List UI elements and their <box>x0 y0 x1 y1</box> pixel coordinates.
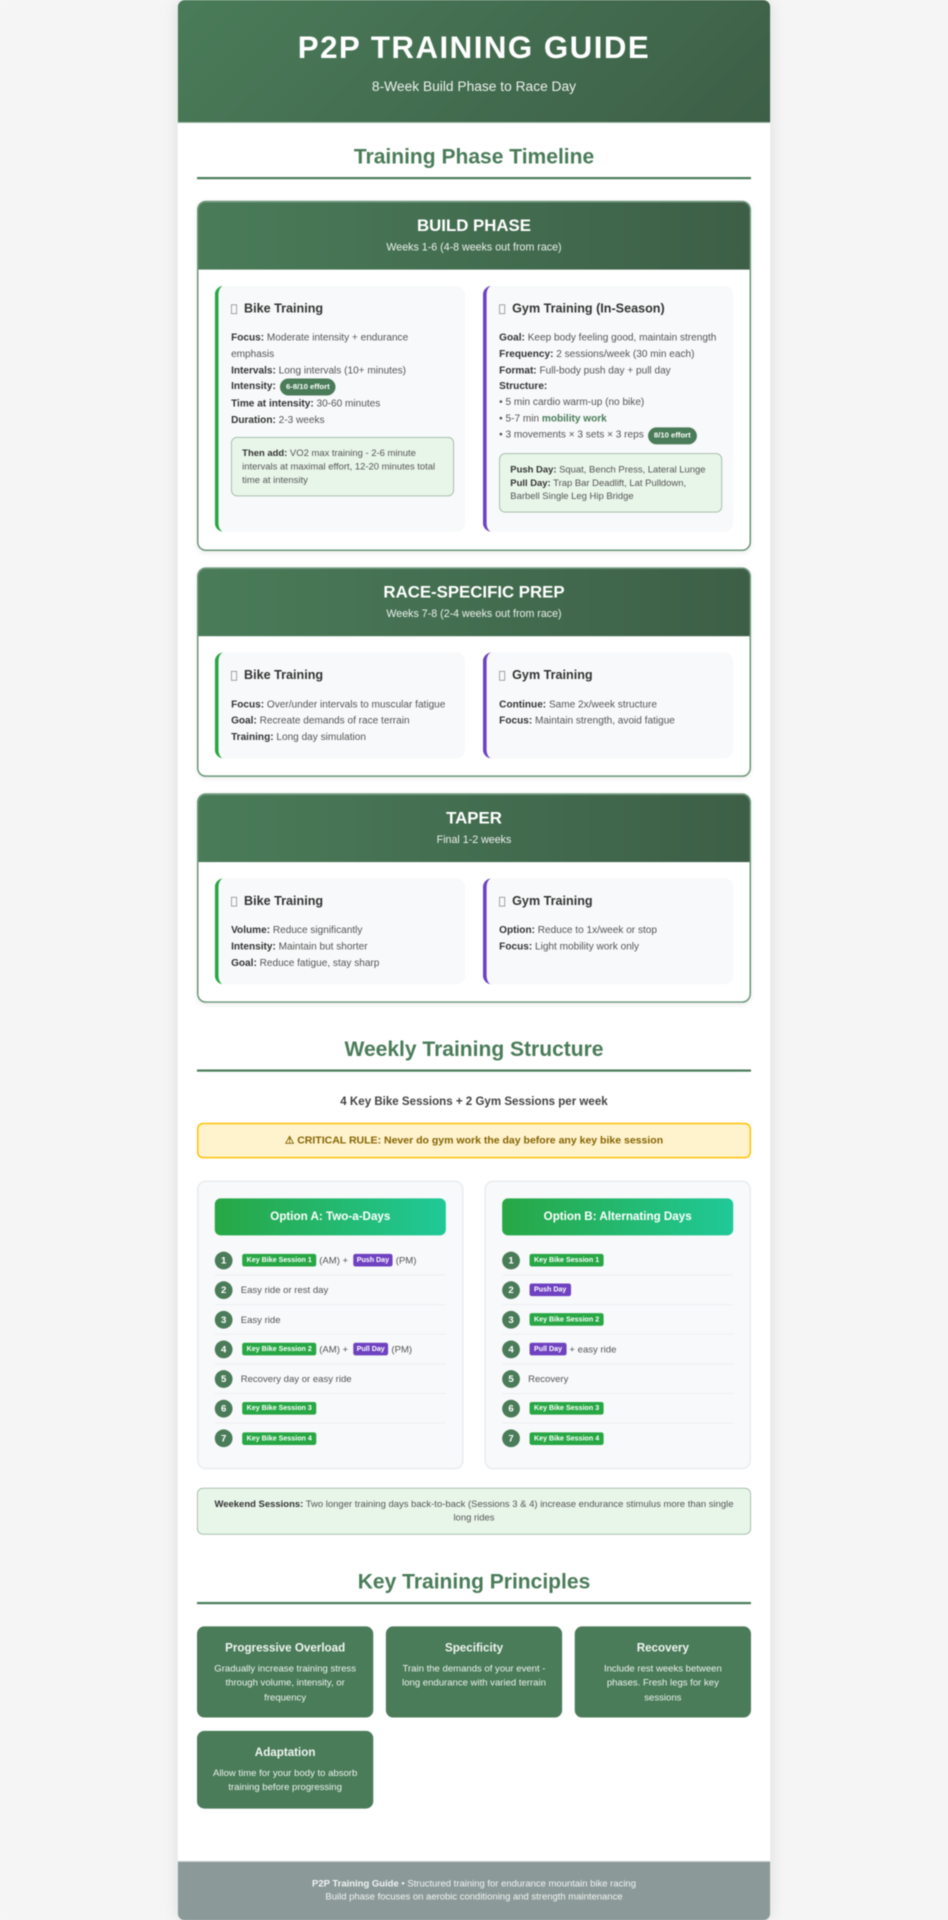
card: taper gym training <box>483 878 733 984</box>
taper header: Final 1-2 weeks <box>437 834 511 846</box>
panel: option A: Easy ride or rest day <box>241 1284 328 1295</box>
race-specific header: Weeks 7-8 (2-4 weeks out from race) <box>386 608 562 620</box>
section heading: principles: Key Training Principles <box>358 1570 590 1594</box>
option A heading <box>215 1198 446 1235</box>
card: build gym training: Frequency: 2 sessions/week (30 min each) <box>499 348 694 359</box>
section heading: timeline <box>197 144 751 179</box>
taper header <box>197 793 751 862</box>
panel: option A: 1 <box>221 1254 226 1265</box>
card: race gym training: Continue: Same 2x/week structure <box>499 698 657 710</box>
taper header: TAPER <box>446 808 502 827</box>
panel: option B: + easy ride <box>569 1343 616 1355</box>
build phase header: BUILD PHASE <box>417 216 531 235</box>
panel: option B <box>484 1181 751 1469</box>
callout: push and pull days: Push Day: Squat, Bench Press, Lateral Lunge <box>510 463 706 474</box>
card: build gym training: Format: Full-body push day + pull day <box>499 364 671 375</box>
panel: option A: Pull Day <box>357 1345 385 1353</box>
section heading: weekly structure: Weekly Training Structure <box>344 1038 604 1061</box>
panel: option A: Key Bike Session 2 <box>247 1345 312 1353</box>
principle: adaptation: Allow time for your body to absorb training before progressing <box>213 1767 357 1792</box>
footer: P2P Training Guide • Structured training for endurance mountain bike racing <box>312 1877 636 1889</box>
principle: specificity: Specificity <box>445 1642 503 1654</box>
card: taper gym training: Gym Training <box>512 894 593 908</box>
panel: option B: Pull Day <box>534 1345 562 1353</box>
card: build gym training: Gym Training (In-Season) <box>512 301 665 316</box>
panel: option B: Push Day <box>534 1286 566 1294</box>
panel: option A: (AM) + (PM) <box>319 1343 412 1355</box>
principle: progressive overload: Progressive Overload <box>225 1642 345 1654</box>
panel: option B: Key Bike Session 3 <box>534 1404 599 1412</box>
panel: option A: 6 <box>221 1402 226 1413</box>
card: build bike training <box>215 286 465 532</box>
panel: option A: Key Bike Session 3 <box>247 1404 312 1412</box>
panel: option B: 3 <box>508 1313 514 1325</box>
card: build gym training: Goal: Keep body feeling good, maintain strength <box>499 332 716 343</box>
panel: option A: Key Bike Session 4 <box>247 1434 312 1442</box>
card: taper bike training: Bike Training <box>244 894 323 908</box>
card: taper bike training: Intensity: Maintain but shorter <box>231 940 368 952</box>
panel: option B: 4 <box>508 1343 514 1354</box>
footer: Build phase focuses on aerobic conditioning and strength maintenance <box>325 1891 623 1902</box>
principle: recovery <box>575 1626 751 1718</box>
principle: adaptation <box>197 1731 373 1809</box>
build phase header <box>197 201 751 270</box>
principle: specificity: Train the demands of your event - long endurance with varied terrain <box>402 1662 546 1688</box>
card: race bike training: Bike Training <box>244 668 323 682</box>
principle: recovery: Include rest weeks between phases. Fresh legs for key sessions <box>604 1662 722 1702</box>
card: build bike training: Duration: 2-3 weeks <box>231 414 325 425</box>
panel: option B: 1 <box>508 1254 514 1265</box>
weekly summary text: 4 Key Bike Sessions + 2 Gym Sessions per week <box>340 1095 608 1108</box>
panel: option A: 5 <box>221 1373 226 1384</box>
principle: progressive overload: Gradually increase training stress through volume, intensity, or frequency <box>214 1662 356 1702</box>
panel: option B: 2 <box>508 1284 514 1295</box>
card: build bike training: Intervals: Long intervals (10+ minutes) <box>231 364 406 375</box>
race-specific header <box>197 567 751 636</box>
card: build gym training <box>483 286 733 532</box>
weekly options wrapper <box>197 1180 751 1470</box>
panel: option A: Push Day <box>357 1256 389 1264</box>
card: build gym training: Structure: <box>499 380 547 391</box>
card: taper gym training: Option: Reduce to 1x/week or stop <box>499 924 657 935</box>
panel: option B: Recovery <box>528 1373 568 1384</box>
panel: option A: 4 <box>221 1343 226 1354</box>
callout: then add <box>231 437 454 497</box>
race-specific header: RACE-SPECIFIC PREP <box>383 582 565 601</box>
card: build bike training: Bike Training <box>244 301 323 316</box>
card: race bike training: Goal: Recreate demands of race terrain <box>231 715 410 726</box>
critical rule callout <box>197 1123 751 1158</box>
panel: option A: 7 <box>221 1432 226 1443</box>
card: race bike training: Focus: Over/under intervals to muscular fatigue <box>231 698 445 710</box>
panel: option A: 2 <box>221 1284 226 1295</box>
card: taper bike training <box>215 878 465 984</box>
card: build bike training: Intensity: <box>231 380 276 391</box>
callout: push and pull days: Pull Day: Trap Bar Deadlift, Lat Pulldown, Barbell Single Leg Hip Bridge <box>510 477 686 501</box>
card: taper bike training: Volume: Reduce significantly <box>231 924 362 935</box>
build phase header: Weeks 1-6 (4-8 weeks out from race) <box>386 241 562 253</box>
option A heading: Option A: Two-a-Days <box>270 1210 390 1223</box>
callout: push and pull days <box>499 453 722 513</box>
card: race bike training <box>215 652 465 758</box>
panel: option B: Key Bike Session 4 <box>534 1434 599 1442</box>
panel: option B: 5 <box>508 1373 514 1384</box>
card: race gym training: Gym Training <box>512 668 593 682</box>
header banner <box>178 0 770 123</box>
card: race gym training: Focus: Maintain strength, avoid fatigue <box>499 715 675 726</box>
panel: option A: (AM) + (PM) <box>319 1255 416 1266</box>
card: build bike training: Focus: Moderate intensity + endurance emphasis <box>231 332 408 359</box>
card: race bike training: Training: Long day simulation <box>231 731 366 742</box>
principle: recovery: Recovery <box>637 1642 689 1654</box>
card: build bike training: 6-8/10 effort <box>286 383 330 391</box>
weekend sessions callout: Weekend Sessions: Two longer training days back-to-back (Sessions 3 & 4) increase endurance stimulus more than single long rides <box>214 1498 734 1523</box>
title: P2P TRAINING GUIDE <box>298 30 650 64</box>
panel: option B: Key Bike Session 2 <box>534 1315 599 1323</box>
card: taper bike training: Goal: Reduce fatigue, stay sharp <box>231 957 379 968</box>
panel: taper <box>197 793 751 1003</box>
option B heading: Option B: Alternating Days <box>544 1210 692 1223</box>
panel: option B: 7 <box>508 1432 514 1443</box>
panel: option A: Easy ride <box>241 1314 281 1325</box>
callout: then add: Then add: VO2 max training - 2-6 minute intervals at maximal effort, 12-20 minutes total time at intensity <box>242 447 435 485</box>
subtitle: 8-Week Build Phase to Race Day <box>372 79 576 94</box>
principle: adaptation: Adaptation <box>255 1746 315 1759</box>
card: taper gym training: Focus: Light mobility work only <box>499 940 639 952</box>
card: build gym training: • 5 min cardio warm-up (no bike) <box>499 396 644 407</box>
section heading: timeline: Training Phase Timeline <box>354 145 594 169</box>
card: build gym training: • 5-7 min mobility work <box>499 412 607 424</box>
principles grid <box>196 1626 752 1810</box>
critical rule callout: ⚠ CRITICAL RULE: Never do gym work the day before any key bike session <box>285 1135 663 1146</box>
panel: race-specific prep <box>197 567 751 777</box>
footer <box>178 1861 770 1920</box>
panel: option A <box>197 1181 464 1469</box>
card: build bike training: Time at intensity: 30-60 minutes <box>231 398 380 409</box>
option B heading <box>502 1198 733 1235</box>
weekend sessions callout <box>197 1488 751 1535</box>
section heading: weekly structure <box>197 1037 751 1072</box>
principle: progressive overload <box>197 1626 373 1718</box>
principle: specificity <box>386 1626 562 1718</box>
panel: option A: Key Bike Session 1 <box>247 1256 312 1264</box>
panel: option B: Key Bike Session 1 <box>534 1256 599 1264</box>
card: build gym training: • 3 movements × 3 sets × 3 reps <box>499 429 644 440</box>
panel: option A: 3 <box>221 1313 226 1325</box>
card: build gym training: 8/10 effort <box>654 431 691 440</box>
panel: build phase <box>197 201 751 551</box>
panel: option B: 6 <box>508 1402 514 1413</box>
card: race gym training <box>483 652 733 758</box>
panel: option A: Recovery day or easy ride <box>241 1373 352 1384</box>
section heading: principles <box>197 1569 751 1604</box>
